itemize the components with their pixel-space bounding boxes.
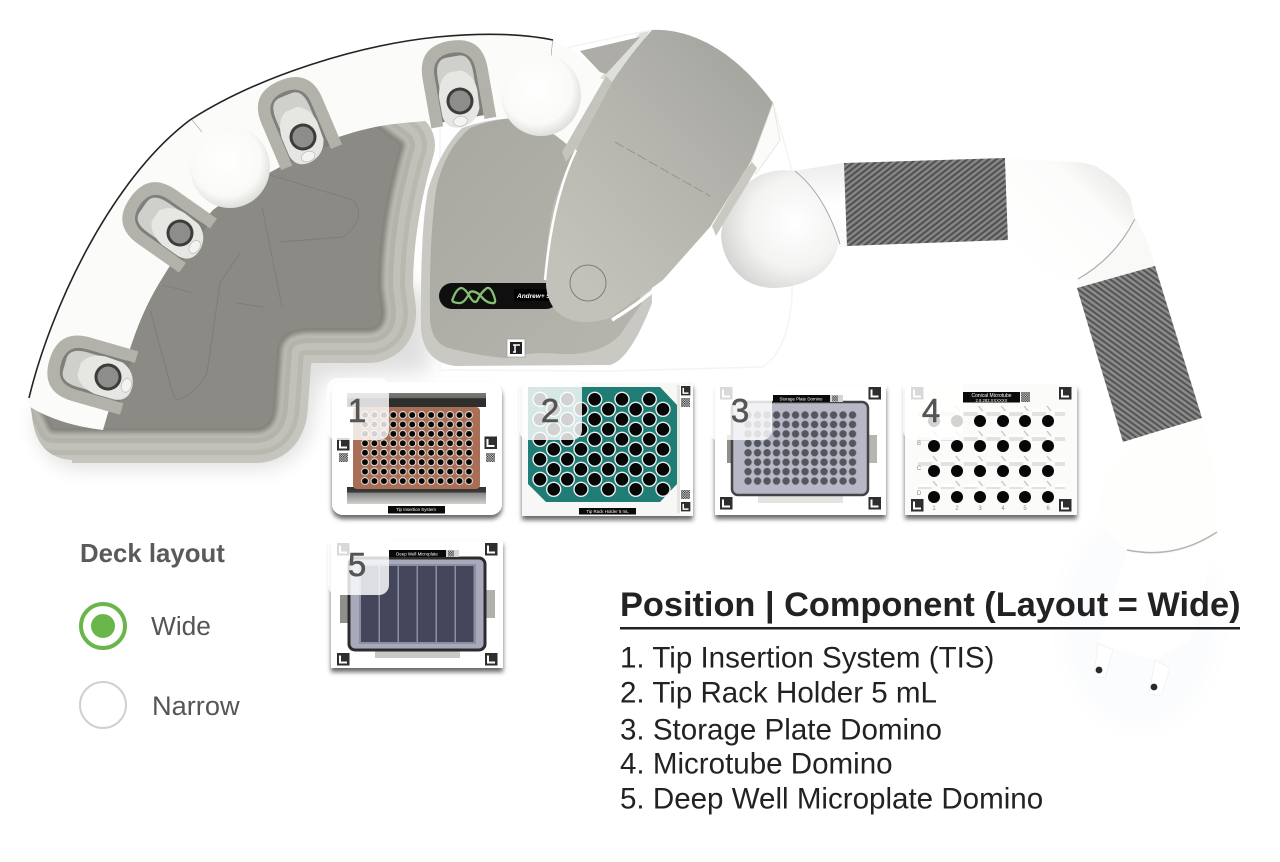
- elbow joint arc: [1078, 219, 1135, 279]
- number badge 2: [519, 378, 582, 440]
- label: Tip Insertion System: [396, 507, 436, 512]
- gripper fingers: [1094, 643, 1170, 696]
- head right white wedge: [751, 103, 780, 174]
- bay 4: [417, 35, 497, 132]
- label: Storage Plate Domino: [780, 396, 823, 402]
- dome sphere right: [501, 54, 581, 136]
- number badge 1: [327, 378, 389, 440]
- wide label: Wide: [151, 611, 211, 641]
- well backing: [359, 564, 476, 644]
- side and bottom tabs: [727, 435, 877, 503]
- component list: 2. Tip Rack Holder 5 mL: [620, 676, 937, 710]
- gripper body: [1098, 536, 1217, 660]
- deck layout heading: Deck layout: [80, 540, 225, 568]
- head seam: [615, 142, 710, 196]
- radio wide: [81, 604, 211, 648]
- markers: [680, 385, 693, 513]
- number badge 5: [328, 533, 389, 595]
- number badge 3: 3: [731, 392, 749, 429]
- band seams: [192, 40, 553, 132]
- brand name: Andrew+ 5N: [516, 293, 555, 300]
- head lower sliver: [612, 232, 708, 320]
- component list: 3. Storage Plate Domino: [620, 714, 942, 746]
- position marker on plate: [507, 339, 525, 357]
- component list: [620, 642, 1043, 816]
- component list: 4. Microtube Domino: [620, 748, 893, 780]
- component list: 1. Tip Insertion System (TIS): [620, 642, 994, 674]
- head button circle: [570, 265, 606, 301]
- metal bottom bar: [347, 487, 486, 504]
- row and column labels: D: [917, 491, 922, 497]
- deck tray with terraced rim: [40, 100, 400, 428]
- number badge 4: 4: [922, 392, 940, 429]
- shoulder housing: [795, 163, 847, 247]
- card 3: storage plate: [715, 385, 886, 515]
- row and column labels: 4: [1001, 506, 1005, 512]
- well grid: [743, 410, 857, 486]
- number badge 2: 2: [541, 392, 559, 429]
- teal rack: [528, 387, 677, 502]
- label: Deep Well Microplate: [396, 552, 438, 556]
- elbow: [1005, 158, 1135, 280]
- center base plate: [421, 118, 652, 366]
- number badge 4: [903, 378, 963, 440]
- rails: [915, 404, 1065, 489]
- label: [579, 508, 636, 514]
- component list: 5. Deep Well Microplate Domino: [620, 782, 1043, 816]
- forearm carbon tube: [1077, 266, 1202, 442]
- dome sphere left: [190, 126, 270, 208]
- radio narrow: [80, 682, 240, 728]
- wrist ball: [1099, 418, 1217, 553]
- upper carbon tube: [844, 158, 1008, 246]
- card 1: tip insertion system: [332, 382, 502, 515]
- number badge 1: 1: [348, 392, 366, 429]
- head left hinge bar: [562, 76, 612, 162]
- tube grid: [533, 392, 670, 496]
- deck shadow: [35, 200, 430, 468]
- label: Tip Rack Holder 5 mL: [586, 509, 629, 514]
- label: Conical Microtube: [971, 393, 1012, 399]
- number badge 5: 5: [348, 546, 366, 583]
- lower link white: [1077, 218, 1155, 288]
- markers: [720, 387, 881, 510]
- gripper tip left: [1096, 667, 1102, 673]
- label: [388, 506, 445, 514]
- card 5: deep well microplate: [331, 540, 503, 668]
- black arc edge line: [29, 34, 553, 398]
- card 4: microtube: [905, 385, 1077, 515]
- table heading: Position | Component (Layout = Wide): [620, 586, 1241, 624]
- robot arm: [712, 158, 1217, 696]
- icon: green logo: [452, 288, 495, 303]
- row and column labels: 5: [1023, 506, 1027, 512]
- label: [963, 392, 1030, 403]
- hinge bar on shoulder: [712, 162, 757, 236]
- number badge 3: [708, 378, 772, 440]
- row and column labels: [917, 441, 1050, 512]
- side and bottom tabs: [340, 590, 495, 658]
- wrist joint arc: [1127, 532, 1217, 553]
- bay 1: [40, 328, 142, 416]
- arm head cover: [545, 30, 780, 322]
- markers: [911, 387, 1072, 512]
- shoulder joint line: [795, 171, 840, 244]
- robot base shell: [440, 30, 792, 371]
- logo pill: [439, 283, 559, 309]
- card 2: tip rack holder: [522, 383, 693, 516]
- bay 3: [249, 68, 344, 174]
- metal top bar: [347, 393, 486, 407]
- head left sliver: [545, 150, 576, 280]
- well columns: [361, 566, 474, 642]
- row and column labels: 3: [978, 506, 982, 512]
- markers: [337, 543, 498, 666]
- label: 2.8.282.XXXXXX: [976, 398, 1008, 403]
- gripper tip right: [1151, 684, 1157, 690]
- tube holes: [928, 415, 1054, 503]
- background halo around the gripper: [1060, 510, 1220, 730]
- brand tag: [514, 289, 558, 301]
- row and column labels: 6: [1046, 506, 1050, 512]
- label: [773, 395, 843, 402]
- narrow label: Narrow: [152, 690, 240, 721]
- label: [389, 550, 459, 557]
- copper plate: [353, 407, 480, 489]
- plate: [732, 402, 868, 495]
- shoulder ball: [721, 170, 839, 288]
- row and column labels: C: [917, 466, 922, 472]
- markers: [337, 436, 497, 462]
- row and column labels: B: [917, 441, 921, 447]
- plate: [349, 558, 485, 650]
- white deck arc band: [29, 34, 605, 430]
- row and column labels: 2: [955, 506, 959, 512]
- well grid: [360, 410, 474, 486]
- side strip: [677, 385, 693, 513]
- bay 2: [111, 171, 220, 275]
- row and column labels: 1: [932, 506, 936, 512]
